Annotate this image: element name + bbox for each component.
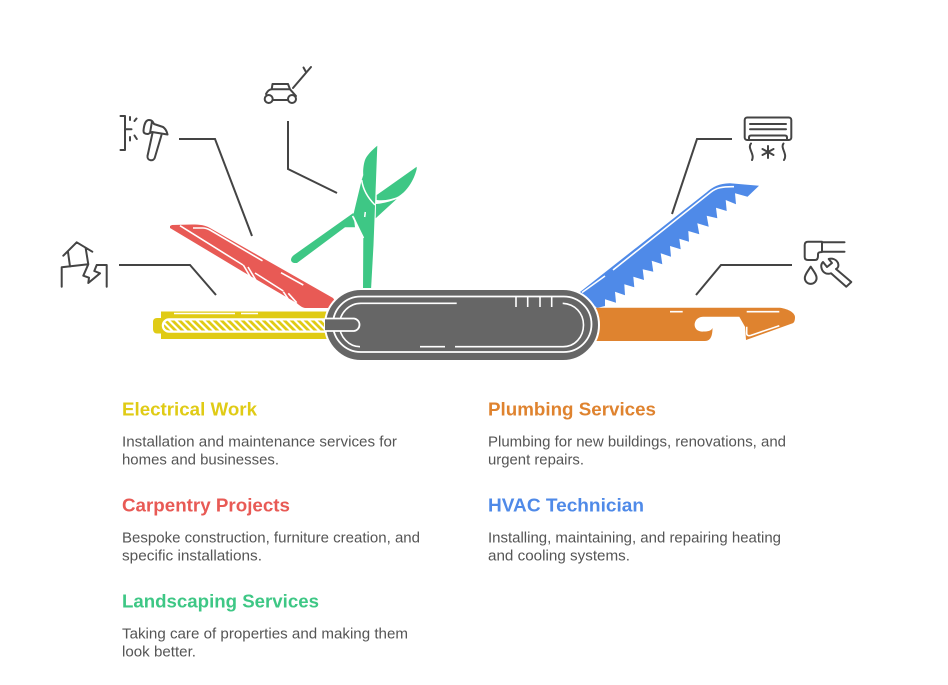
text block: carpentry projects: Carpentry Projects xyxy=(122,494,290,516)
leader line: plumbing xyxy=(696,265,792,295)
icon: house with lightning bolt xyxy=(62,242,107,287)
icon: hammer xyxy=(120,116,168,160)
text block: plumbing services: Plumbing Services xyxy=(488,398,656,420)
text block: electrical work xyxy=(122,398,397,468)
tool: blue saw blade xyxy=(580,183,759,308)
text block: carpentry projects xyxy=(122,494,420,564)
leader line: electrical xyxy=(119,265,216,295)
text block: carpentry projects: Bespoke construction, furniture creation, and xyxy=(122,530,420,546)
multi-tool illustration xyxy=(153,146,795,361)
tool: yellow screwdriver with hatched slot xyxy=(153,312,332,339)
icon: lawn mower xyxy=(265,67,311,103)
leader line: carpentry xyxy=(179,139,252,236)
text block: landscaping services: Taking care of properties and making them xyxy=(122,626,408,642)
text block: hvac technician xyxy=(488,494,781,564)
text block: plumbing services xyxy=(488,398,786,468)
leader line: hvac xyxy=(672,139,732,214)
text block: electrical work: Installation and maintenance services for xyxy=(122,434,397,450)
text block: electrical work: Electrical Work xyxy=(122,398,258,420)
icon: faucet, drop and wrench xyxy=(805,242,851,287)
tool body: gray handle xyxy=(325,289,599,361)
tool: orange bottle opener xyxy=(590,308,795,341)
text block: plumbing services: Plumbing for new buildings, renovations, and xyxy=(488,434,786,450)
text block: carpentry projects: specific installations. xyxy=(122,548,262,564)
text block: electrical work: homes and businesses. xyxy=(122,452,279,468)
text block: landscaping services xyxy=(122,590,408,660)
text block: plumbing services: urgent repairs. xyxy=(488,452,584,468)
icon: air conditioner xyxy=(745,118,791,160)
text block: landscaping services: Landscaping Services xyxy=(122,590,319,612)
text block: landscaping services: look better. xyxy=(122,644,196,660)
tool: red chisel blade xyxy=(170,224,340,308)
text block: hvac technician: HVAC Technician xyxy=(488,494,644,516)
text block: hvac technician: Installing, maintaining, and repairing heating xyxy=(488,530,781,546)
leader line: landscaping xyxy=(288,121,337,193)
tool: green shears xyxy=(291,146,417,290)
text block: hvac technician: and cooling systems. xyxy=(488,548,630,564)
